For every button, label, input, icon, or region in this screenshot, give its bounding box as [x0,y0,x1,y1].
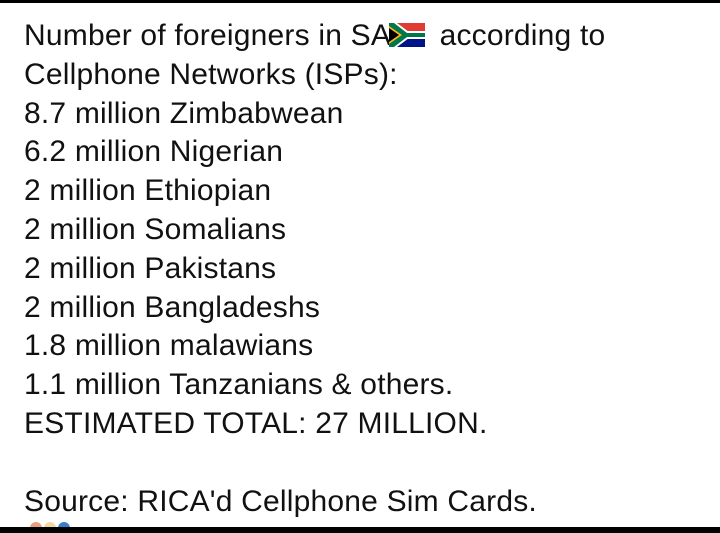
text block: foreigner counts: 2 million Ethiopian [24,174,271,207]
heading line with flag: Number of foreigners in SA according to [24,19,605,52]
text block: foreigner counts: ESTIMATED TOTAL: 27 MILLION. [24,407,488,440]
source line: Source: RICA'd Cellphone Sim Cards. [24,485,537,518]
icon: partial reaction dots [30,522,70,527]
text block: foreigner counts: 1.8 million malawians [24,329,313,362]
text block: foreigner counts: Cellphone Networks (ISPs): [24,58,398,91]
text block: foreigner counts: 2 million Somalians [24,213,286,246]
icon: South African flag [389,23,425,47]
text block: foreigner counts: 1.1 million Tanzanians & others. [24,368,453,401]
text block: foreigner counts: 2 million Bangladeshs [24,291,320,324]
text block: foreigner counts: 8.7 million Zimbabwean [24,97,344,130]
text block: foreigner counts: 2 million Pakistans [24,252,276,285]
text block: foreigner counts: 6.2 million Nigerian [24,135,283,168]
text block: foreigner counts [24,19,605,518]
